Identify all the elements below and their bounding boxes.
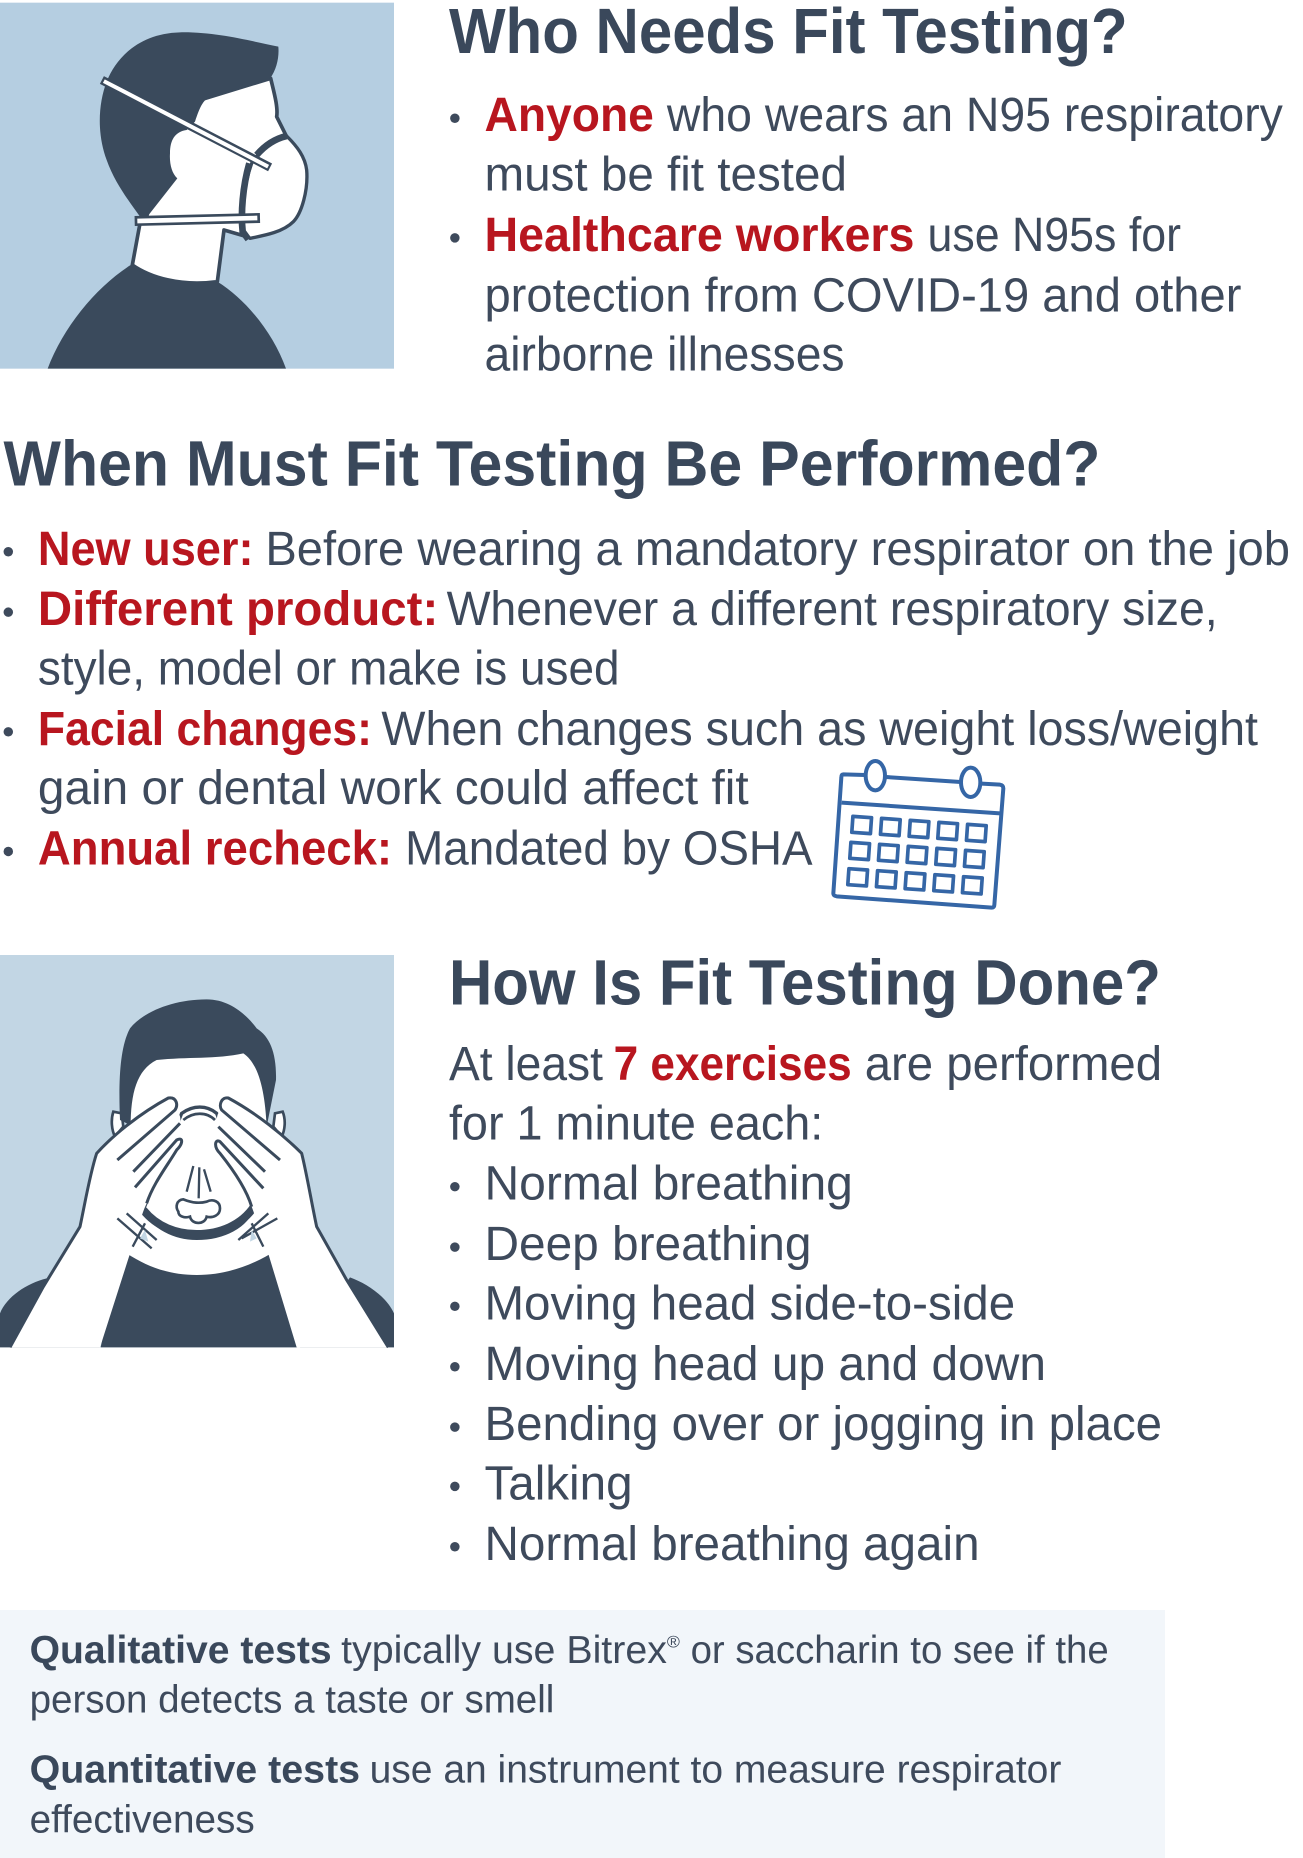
list: seven exercises: Talking — [484, 1456, 633, 1510]
text block: when fit testing must be performed: New user: — [38, 522, 253, 576]
text block: qualitative tests — [30, 1629, 1109, 1722]
text block: quantitative tests — [30, 1749, 1061, 1841]
text block: when fit testing must be performed: When changes such as weight loss/weight — [381, 702, 1258, 756]
text block: when fit testing must be performed: Annual recheck: — [38, 821, 392, 875]
list: seven exercises: Normal breathing — [484, 1157, 853, 1211]
icon: calendar — [833, 761, 1003, 908]
text block: when fit testing must be performed: Before wearing a mandatory respirator on the job — [265, 522, 1290, 576]
text block: exercises intro: At least — [449, 1037, 603, 1091]
illustration: man in profile wearing N95 mask — [0, 3, 394, 369]
text block: quantitative tests: Quantitative tests — [30, 1749, 360, 1792]
text block: quantitative tests: effectiveness — [30, 1798, 255, 1841]
text block: when fit testing must be performed — [4, 522, 1290, 875]
text block: exercises intro — [449, 1037, 1162, 1150]
heading: When Must Fit Testing Be Performed: When Must Fit Testing Be Performed? — [4, 427, 1100, 499]
text block: who needs fit testing bullets: protection from COVID-19 and other — [484, 268, 1241, 322]
text block: when fit testing must be performed: style, model or make is used — [38, 641, 620, 695]
text block: when fit testing must be performed: Whenever a different respiratory size, — [447, 582, 1218, 636]
text block: quantitative tests: use an instrument to measure respirator — [370, 1749, 1061, 1792]
list: seven exercises — [450, 1157, 1162, 1571]
text block: when fit testing must be performed: Mandated by OSHA — [405, 821, 813, 875]
text block: when fit testing must be performed: Different product: — [38, 582, 438, 636]
text block: who needs fit testing bullets: use N95s for — [928, 208, 1181, 262]
text block: who needs fit testing bullets — [450, 88, 1284, 382]
text block: qualitative tests: Qualitative tests — [30, 1629, 332, 1672]
illustration: man checking respirator seal with both hands — [0, 955, 394, 1347]
text block: qualitative tests: typically use Bitrex — [341, 1629, 667, 1672]
panel: qualitative and quantitative tests background — [0, 1610, 1165, 1858]
list: seven exercises: Normal breathing again — [484, 1517, 980, 1571]
text block: when fit testing must be performed: gain or dental work could affect fit — [38, 761, 749, 815]
list: seven exercises: Moving head up and down — [484, 1337, 1046, 1391]
text block: qualitative tests: ® — [667, 1632, 680, 1651]
text block: qualitative tests: or saccharin to see if the — [691, 1629, 1109, 1672]
text block: exercises intro: for 1 minute each: — [449, 1096, 823, 1150]
text block: who needs fit testing bullets: must be fit tested — [484, 147, 847, 201]
text block: when fit testing must be performed: Facial changes: — [38, 702, 372, 756]
text block: exercises intro: 7 exercises — [614, 1037, 852, 1091]
text block: who needs fit testing bullets: who wears an N95 respiratory — [666, 88, 1284, 142]
text block: who needs fit testing bullets: airborne illnesses — [484, 328, 845, 382]
list: seven exercises: Bending over or jogging in place — [484, 1397, 1162, 1451]
list: seven exercises: Moving head side-to-side — [484, 1276, 1015, 1330]
text block: exercises intro: are performed — [865, 1037, 1162, 1091]
text block: qualitative tests: person detects a taste or smell — [30, 1679, 554, 1722]
heading: How Is Fit Testing Done: How Is Fit Testing Done? — [449, 946, 1161, 1018]
list: seven exercises: Deep breathing — [484, 1217, 811, 1271]
text block: who needs fit testing bullets: Anyone — [484, 88, 654, 142]
text block: who needs fit testing bullets: Healthcare workers — [484, 208, 914, 262]
